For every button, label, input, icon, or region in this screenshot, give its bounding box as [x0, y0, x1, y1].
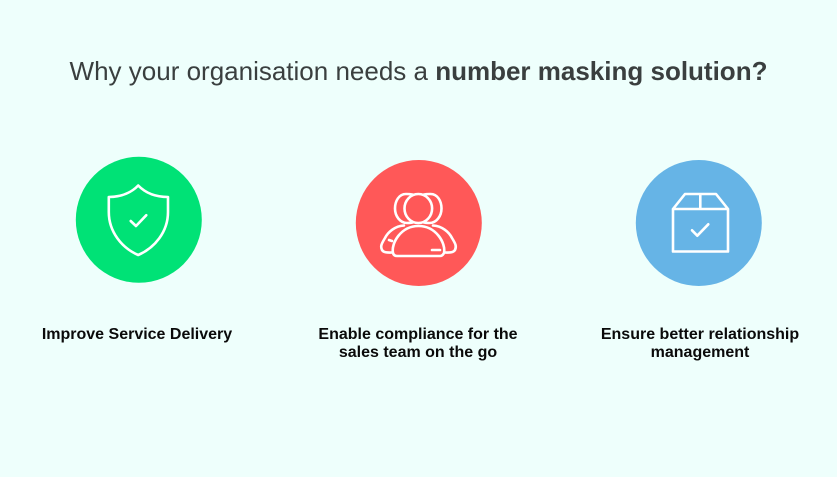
icon: green shield [76, 157, 202, 283]
label: better relationship management: Ensure better relationship [601, 326, 799, 343]
icon: red people [356, 160, 482, 286]
label: better relationship management [601, 326, 799, 361]
title: Why your organisation needs a number masking solution? [70, 56, 767, 86]
label: improve service delivery: Improve Service Delivery [42, 326, 232, 343]
label: better relationship management: management [651, 344, 749, 361]
icon: blue box [636, 160, 762, 286]
label: enable compliance: Enable compliance for the [318, 326, 518, 343]
label: enable compliance [318, 326, 518, 361]
label: enable compliance: sales team on the go [339, 344, 497, 361]
